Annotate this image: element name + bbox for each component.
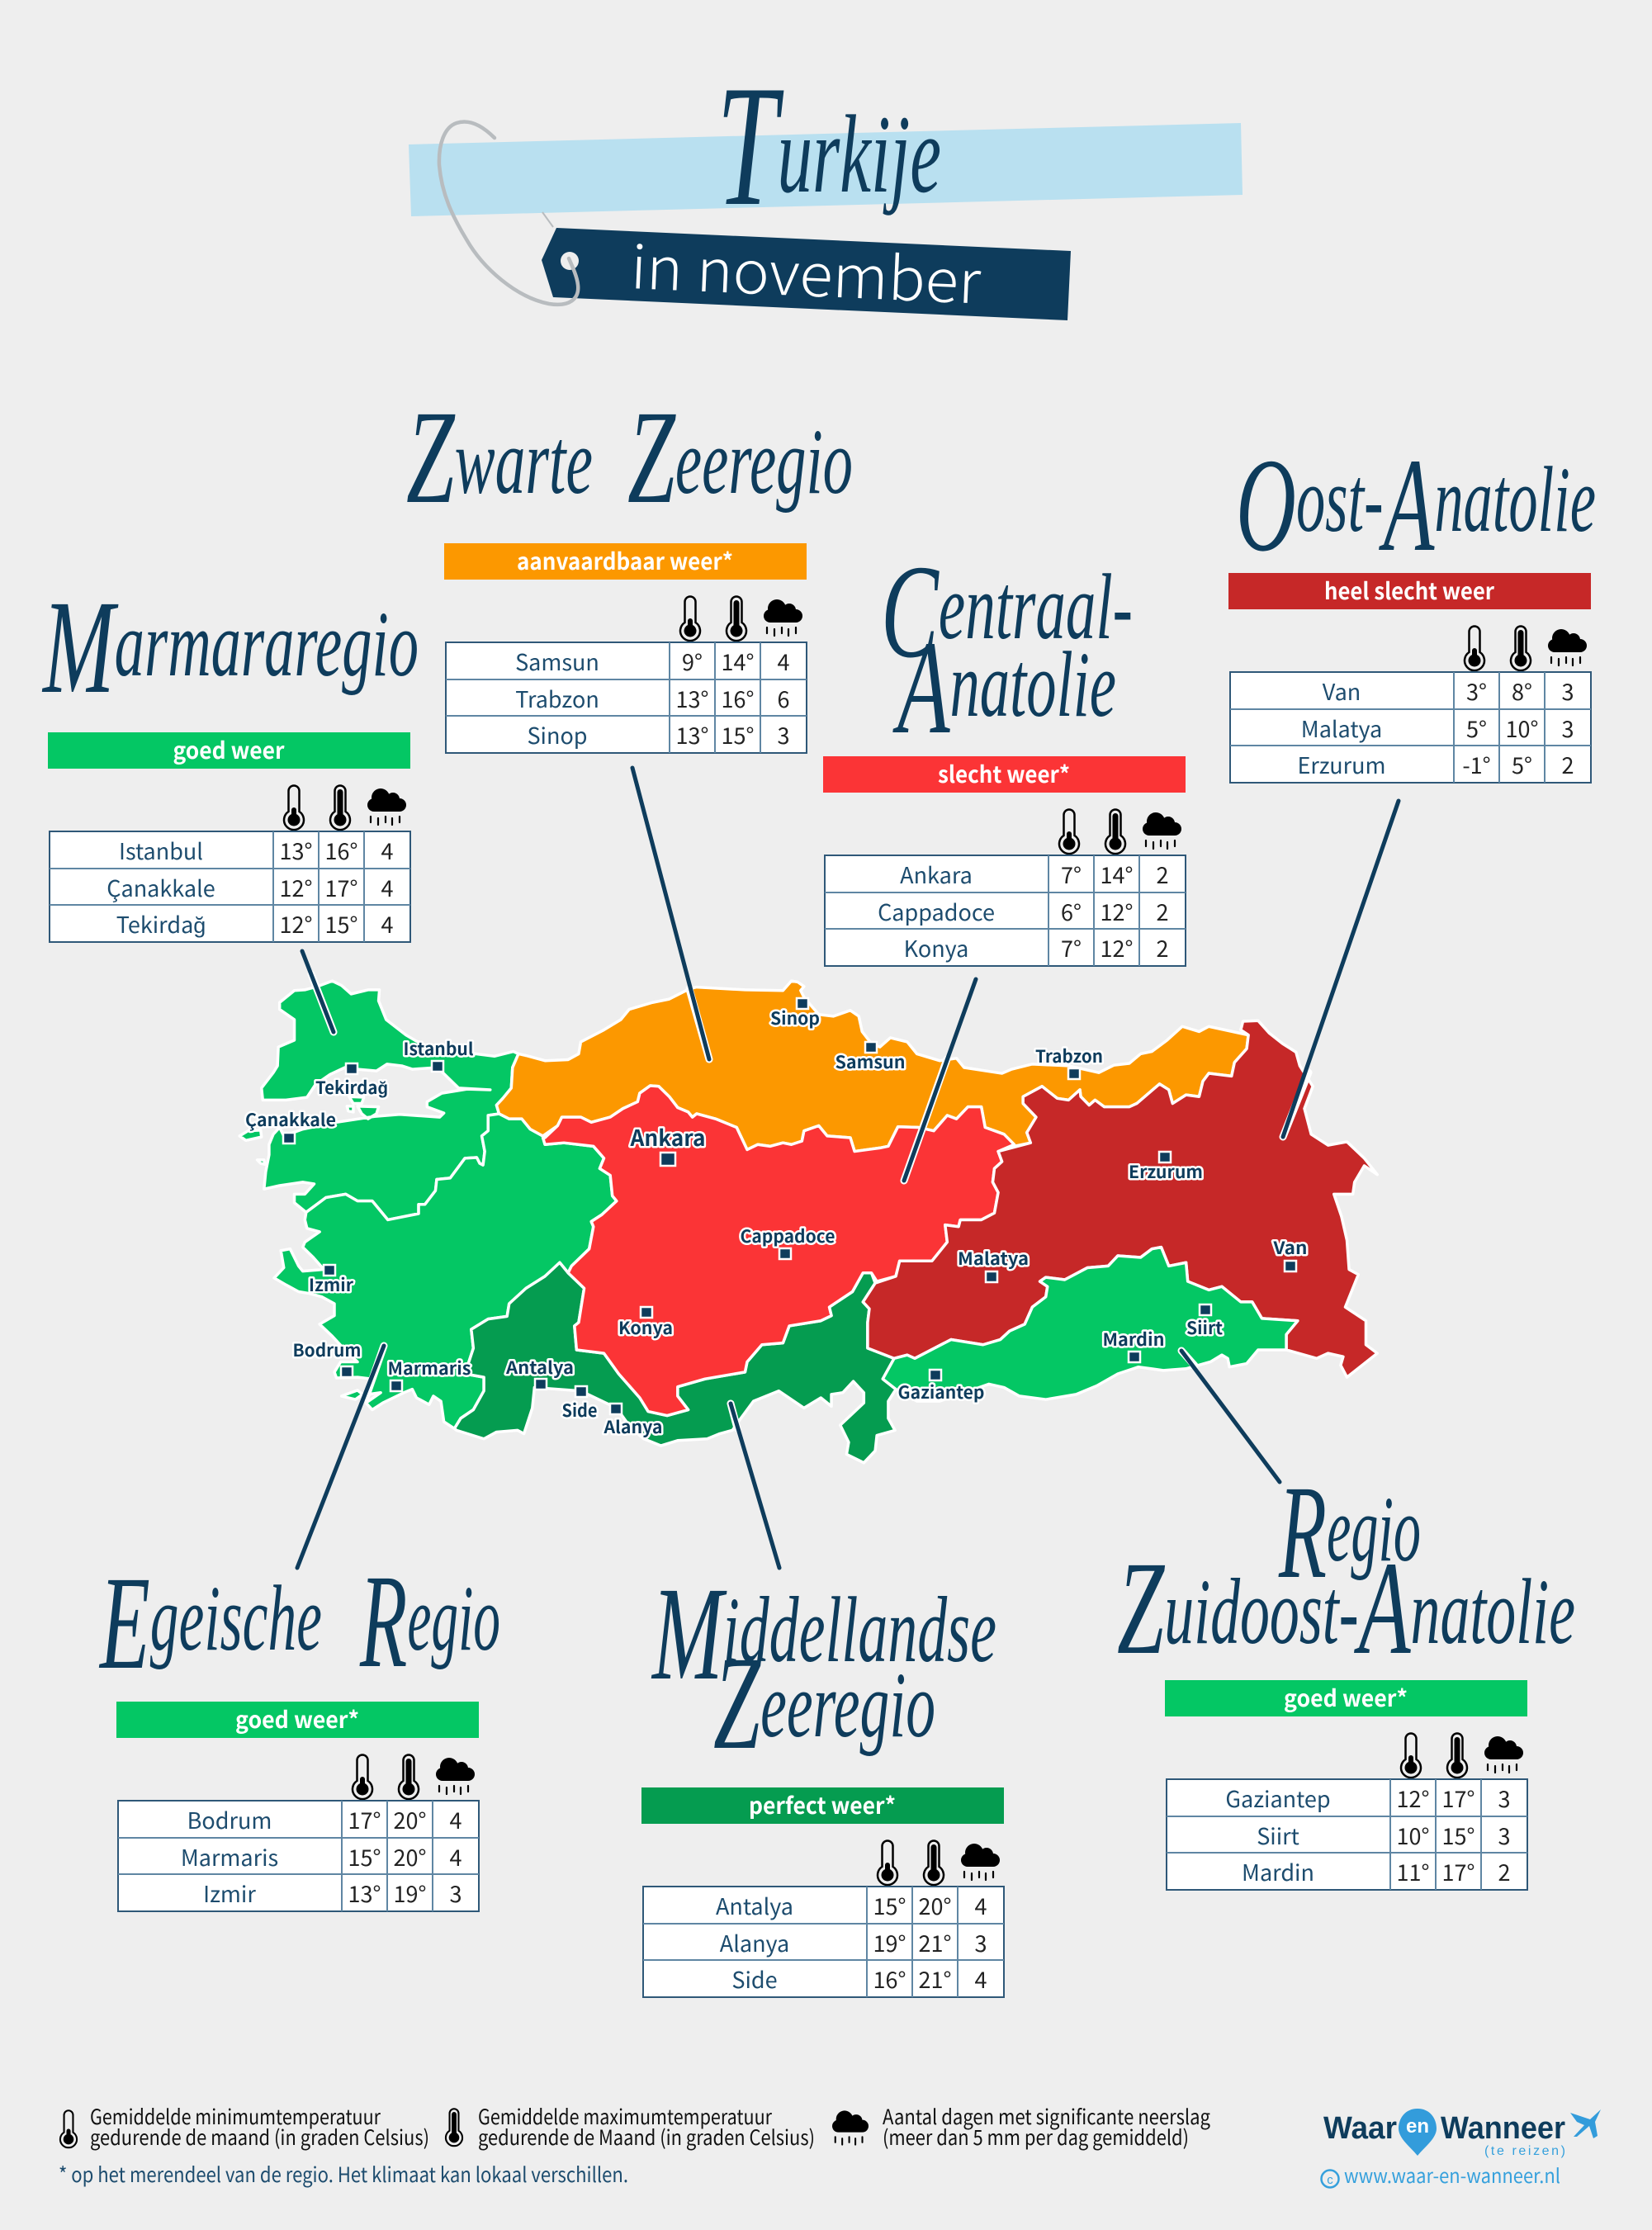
rating banner [1228, 573, 1591, 609]
logo wordmark [1323, 2111, 1565, 2146]
city: Konya: Konya [618, 1315, 673, 1340]
heading: Egeische Regio: E [99, 1550, 150, 1697]
weather table: Bodrum [187, 1803, 272, 1835]
legend: maximum temperature: Gemiddelde maximumtemperatuur [478, 2101, 772, 2131]
weather table: 5° [1466, 712, 1487, 744]
rating banner [116, 1702, 479, 1738]
weather table [446, 642, 807, 753]
string loop [439, 121, 578, 305]
weather table: 16° [873, 1962, 906, 1995]
weather table: Van [1323, 675, 1361, 707]
heading: Egeische Regio [99, 1548, 500, 1697]
heading: Zwarte Zeeregio [406, 384, 853, 532]
region: East Anatolia [863, 1020, 1377, 1377]
heading: Marmararegio: armararegio [115, 593, 419, 696]
city: Istanbul [403, 1036, 474, 1072]
heading: Middellandse Zeeregio: M [651, 1560, 727, 1708]
weather table [1230, 672, 1591, 783]
footnote: * op het merendeel van de regio. Het klimaat kan lokaal verschillen. [59, 2159, 628, 2189]
heading: Oost-Anatolie: ost- [1296, 448, 1384, 552]
legend: precipitation: Aantal dagen met significante neerslag [883, 2101, 1210, 2131]
weather table: 4 [778, 645, 789, 677]
weather table: Antalya [716, 1889, 793, 1921]
tag hole [561, 252, 579, 270]
heading: Regio Zuidoost-Anatolie: R [1278, 1459, 1327, 1607]
city: Ankara: Ankara [630, 1120, 705, 1153]
weather table: 11° [1397, 1855, 1429, 1887]
heading: Middellandse Zeeregio [651, 1560, 996, 1778]
weather table: Tekirdağ [116, 907, 206, 940]
city: Izmir: Izmir [309, 1272, 354, 1297]
city: Samsun: Samsun [835, 1049, 905, 1074]
heading: Zwarte Zeeregio: Z [406, 384, 456, 532]
weather table: 3 [1562, 675, 1574, 707]
region: Black Sea [496, 981, 1248, 1152]
weather table: Marmaris [181, 1840, 278, 1873]
legend: minimum temperature: gedurende de maand (in graden Celsius) [90, 2122, 429, 2152]
panel: Regio Zuidoost-Anatolie [1117, 1459, 1575, 1890]
heading: Egeische Regio: R [359, 1548, 407, 1696]
rating banner: slecht weer* [938, 757, 1070, 790]
weather table: 4 [381, 834, 393, 866]
weather icons [353, 1755, 475, 1799]
city: Tekirdag [315, 1063, 388, 1100]
weather table: 4 [449, 1803, 462, 1835]
logo tagline: (te reizen) [1484, 2144, 1565, 2158]
city: Side: Side [561, 1398, 598, 1423]
weather icons [1465, 626, 1587, 670]
weather table: Istanbul [119, 834, 203, 866]
panel: Zwarte Zeeregio [406, 384, 853, 753]
heading: Marmararegio: M [42, 574, 119, 722]
heading: Egeische Regio: egio [407, 1567, 500, 1670]
logo plane [1570, 2109, 1601, 2138]
weather icons [878, 1841, 1000, 1885]
legend: minimum temperature: Gemiddelde minimumtemperatuur [90, 2101, 381, 2131]
weather table: Konya [904, 931, 968, 963]
rating banner: goed weer* [1284, 1681, 1408, 1714]
legend: precipitation: (meer dan 5 mm per dag gemiddeld) [883, 2122, 1189, 2152]
panel body [1228, 573, 1591, 783]
heading: Regio Zuidoost-Anatolie: Z [1117, 1535, 1165, 1683]
rating banner [48, 732, 410, 769]
price tag [542, 228, 1071, 320]
weather table: 14° [1101, 858, 1133, 890]
weather table: 3 [1498, 1782, 1511, 1814]
main title: urkije [778, 93, 941, 216]
weather table [118, 1801, 479, 1911]
region: Marmara [239, 981, 518, 1219]
weather table: 21° [919, 1926, 951, 1958]
weather table: 15° [873, 1889, 906, 1921]
panel body [116, 1702, 479, 1911]
panel: Oost-Anatolie [1228, 432, 1596, 783]
weather table: 15° [1442, 1819, 1474, 1851]
weather table: Malatya [1301, 712, 1382, 744]
logo wordmark: Waar [1323, 2111, 1397, 2146]
city: Alanya: Alanya [603, 1414, 662, 1439]
heading: Centraal-Anatolie: A [892, 614, 950, 762]
weather table: 12° [1101, 931, 1133, 963]
weather table: 16° [722, 682, 754, 714]
city: Erzurum: Erzurum [1129, 1159, 1203, 1184]
weather table: 17° [1442, 1855, 1474, 1887]
weather table: 3° [1466, 675, 1487, 707]
weather table: 17° [1442, 1782, 1474, 1814]
subtitle: in november [629, 219, 983, 321]
heading: Zwarte Zeeregio: Z [627, 384, 676, 532]
weather table: 6° [1061, 895, 1082, 927]
rating banner [641, 1787, 1004, 1824]
weather table: -1° [1462, 748, 1491, 780]
region: Southeast Anatolia [883, 1248, 1298, 1401]
weather table: 8° [1512, 675, 1532, 707]
panel: Centraal-Anatolie [823, 538, 1186, 966]
weather table: Samsun [515, 645, 599, 677]
city: Alanya [603, 1404, 662, 1439]
rating banner [823, 756, 1186, 793]
weather table: 4 [449, 1840, 462, 1873]
heading: Zwarte Zeeregio: eeregio [675, 410, 853, 514]
weather table: Side [731, 1962, 778, 1995]
city: Tekirdag: Tekirdağ [315, 1075, 388, 1100]
city: Siirt: Siirt [1186, 1315, 1223, 1340]
heading: Egeische Regio: geische [150, 1567, 322, 1670]
city: Side [561, 1386, 598, 1423]
panel: Middellandse Zeeregio [641, 1560, 1004, 1997]
city: Canakkale: Çanakkale [245, 1107, 336, 1132]
city: Marmaris: Marmaris [388, 1356, 471, 1380]
weather table: 16° [325, 834, 357, 866]
weather table: 2 [1562, 748, 1574, 780]
weather table: Mardin [1242, 1855, 1314, 1887]
heading: Centraal-Anatolie [881, 538, 1133, 762]
weather table: 3 [1562, 712, 1574, 744]
city: Mardin: Mardin [1103, 1327, 1164, 1352]
rating banner: heel slecht weer [1324, 574, 1495, 607]
city: Cappadoce [740, 1224, 835, 1259]
weather table: 2 [1156, 931, 1169, 963]
city: Trabzon: Trabzon [1035, 1044, 1103, 1068]
panel body [823, 756, 1186, 966]
weather table: 15° [348, 1840, 381, 1873]
logo pin [1399, 2109, 1437, 2156]
weather table: 2 [1156, 895, 1169, 927]
heading: Regio Zuidoost-Anatolie: egio [1327, 1478, 1421, 1581]
weather icons [284, 786, 406, 830]
heading: Oost-Anatolie: O [1236, 432, 1296, 580]
city markers and labels [245, 998, 1308, 1439]
heading: Centraal-Anatolie: C [881, 538, 940, 686]
weather table: 19° [873, 1926, 906, 1958]
pointer lines [297, 768, 1399, 1568]
weather table: 21° [919, 1962, 951, 1995]
weather table: 12° [1101, 895, 1133, 927]
legend: maximum temperature [446, 2101, 815, 2152]
region: Mediterranean [454, 1262, 896, 1463]
city: Sinop: Sinop [770, 1006, 820, 1030]
map of Turkey [239, 981, 1377, 1463]
weather table: Siirt [1257, 1819, 1299, 1851]
heading: Middellandse Zeeregio: eeregio [760, 1654, 935, 1757]
legend: maximum temperature: gedurende de Maand (in graden Celsius) [478, 2122, 815, 2152]
pointer: East Anatolia [1283, 801, 1399, 1137]
city: Istanbul: Istanbul [403, 1036, 474, 1061]
city: Canakkale [245, 1107, 336, 1143]
logo: Waar en Wanneer [1321, 2109, 1601, 2189]
title block [409, 50, 1243, 321]
city: Bodrum: Bodrum [292, 1338, 362, 1362]
legend: precipitation [832, 2101, 1210, 2152]
thin string end [542, 212, 553, 227]
website: c [1327, 2173, 1333, 2187]
city: Antalya: Antalya [505, 1355, 574, 1380]
pointer: Marmara [302, 951, 334, 1032]
website: www.waar-en-wanneer.nl [1344, 2160, 1560, 2189]
weather table: 2 [1498, 1855, 1511, 1887]
heading: Zwarte Zeeregio: warte [455, 410, 593, 514]
city: Van [1272, 1235, 1308, 1271]
rating banner [444, 543, 807, 580]
weather table: 6 [778, 682, 789, 714]
weather table: Erzurum [1297, 748, 1386, 780]
weather table: 5° [1512, 748, 1532, 780]
region: Aegean [274, 1114, 617, 1428]
city: Bodrum [292, 1338, 362, 1377]
rating banner: goed weer [173, 733, 285, 766]
heading: Regio Zuidoost-Anatolie [1117, 1459, 1575, 1683]
weather table: 4 [974, 1889, 987, 1921]
weather table: 7° [1061, 931, 1082, 963]
city: Malatya: Malatya [958, 1246, 1029, 1271]
city: Ankara [630, 1120, 705, 1166]
weather table: 20° [394, 1803, 426, 1835]
weather table: 15° [722, 718, 754, 750]
rating banner: goed weer* [235, 1702, 359, 1735]
legend: minimum temperature [60, 2101, 429, 2152]
weather table: 7° [1061, 858, 1082, 890]
weather table: 13° [676, 682, 708, 714]
weather table [1167, 1779, 1527, 1890]
pointer: Southeast Anatolia [1181, 1351, 1280, 1482]
heading: Centraal-Anatolie: entraal- [939, 556, 1133, 659]
weather table: 3 [778, 718, 789, 750]
city: Malatya [958, 1246, 1029, 1282]
logo wordmark: Wanneer [1441, 2111, 1565, 2146]
main title: T [717, 50, 784, 242]
weather table [825, 855, 1186, 966]
heading: Oost-Anatolie: A [1379, 432, 1435, 580]
weather table: Sinop [527, 718, 588, 750]
city: Mardin [1103, 1327, 1164, 1362]
legend [59, 2101, 1210, 2189]
panel: Egeische Regio [99, 1548, 500, 1911]
weather icons [1401, 1734, 1523, 1778]
weather table [50, 831, 410, 942]
rating banner: aanvaardbaar weer* [517, 544, 733, 577]
weather table: 12° [280, 907, 312, 940]
weather table: 12° [280, 871, 312, 903]
weather table: Alanya [720, 1926, 789, 1958]
weather table: 10° [1397, 1819, 1429, 1851]
pointer: Aegean [297, 1346, 384, 1568]
weather table: 13° [280, 834, 312, 866]
weather table: 3 [449, 1877, 462, 1909]
weather icons [680, 596, 802, 641]
weather table: 9° [682, 645, 703, 677]
heading: Centraal-Anatolie: natolie [950, 633, 1116, 736]
weather table: 20° [394, 1840, 426, 1873]
weather table: 4 [381, 871, 393, 903]
weather table: 4 [381, 907, 393, 940]
panel body [641, 1787, 1004, 1997]
weather table: 2 [1156, 858, 1169, 890]
weather table: 4 [974, 1962, 987, 1995]
rating banner: perfect weer* [749, 1788, 896, 1821]
weather table: Trabzon [515, 682, 599, 714]
heading: Regio Zuidoost-Anatolie: uidoost- [1164, 1560, 1359, 1664]
weather table: 3 [974, 1926, 987, 1958]
weather table: Çanakkale [107, 871, 215, 903]
weather icons [1059, 809, 1181, 854]
weather table: 14° [722, 645, 754, 677]
weather table: 10° [1506, 712, 1538, 744]
city: Marmaris [388, 1356, 471, 1391]
panel body [48, 732, 410, 942]
weather table: 17° [325, 871, 357, 903]
rating banner [1165, 1680, 1527, 1716]
weather table: Cappadoce [878, 895, 995, 927]
city: Cappadoce: Cappadoce [740, 1224, 835, 1248]
weather table: Izmir [203, 1877, 256, 1909]
city: Antalya [505, 1355, 574, 1390]
pointer: Central Anatolia [904, 979, 976, 1181]
weather table [643, 1887, 1004, 1997]
panel body [444, 543, 807, 753]
weather table: 13° [676, 718, 708, 750]
logo pin: en [1406, 2115, 1429, 2138]
city: Van: Van [1272, 1235, 1308, 1260]
panel body [1165, 1680, 1527, 1890]
pointer: Mediterranean [731, 1404, 779, 1568]
city: Trabzon [1035, 1044, 1103, 1079]
weather table: 12° [1397, 1782, 1429, 1814]
city: Siirt [1186, 1304, 1223, 1340]
heading: Middellandse Zeeregio: iddellandse [723, 1579, 996, 1682]
weather table: 17° [348, 1803, 381, 1835]
weather table: Gaziantep [1225, 1782, 1331, 1814]
city: Gaziantep: Gaziantep [898, 1380, 984, 1404]
weather table: 3 [1498, 1819, 1511, 1851]
weather table: 13° [348, 1877, 381, 1909]
heading: Regio Zuidoost-Anatolie: A [1354, 1535, 1411, 1683]
pointer: Black Sea [632, 768, 709, 1059]
region: Central Anatolia [543, 1086, 1014, 1416]
weather table: 20° [919, 1889, 951, 1921]
panel: Marmararegio [42, 574, 419, 942]
title ribbon [409, 123, 1243, 216]
weather table: 19° [394, 1877, 426, 1909]
weather table: 15° [325, 907, 357, 940]
weather table: Ankara [900, 858, 973, 890]
heading: Middellandse Zeeregio: Z [713, 1630, 761, 1778]
